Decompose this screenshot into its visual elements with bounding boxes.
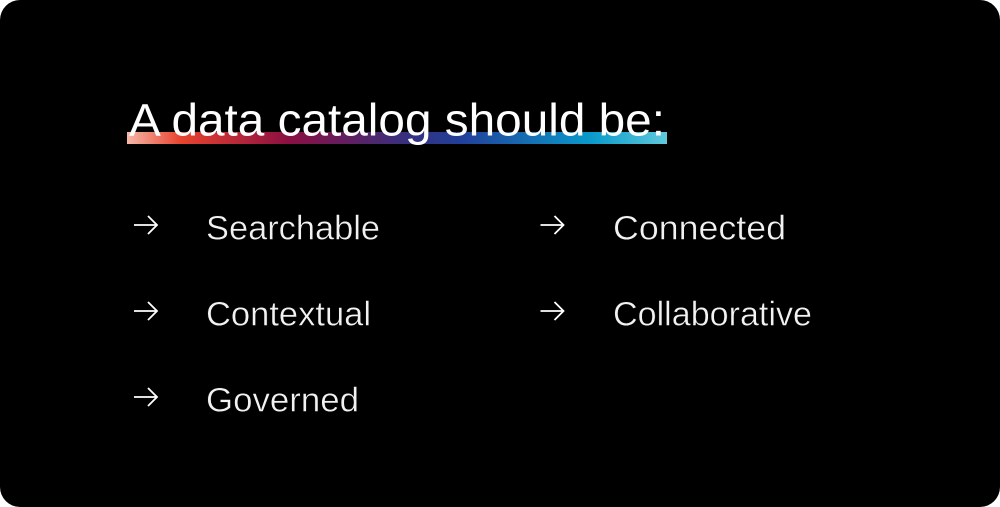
list item: Connected xyxy=(540,210,786,248)
list item: Searchable: Searchable xyxy=(206,210,380,248)
list item: Collaborative: Collaborative xyxy=(613,296,812,334)
list item: Connected: Connected xyxy=(613,210,786,248)
gradient underline xyxy=(127,132,667,144)
list item: Governed xyxy=(134,382,359,420)
list item: Contextual: Contextual xyxy=(206,296,371,334)
list item: Governed: Governed xyxy=(206,382,359,420)
list item: Searchable xyxy=(134,210,380,248)
list item: Contextual xyxy=(134,296,371,334)
title: A data catalog should be: xyxy=(129,94,665,146)
